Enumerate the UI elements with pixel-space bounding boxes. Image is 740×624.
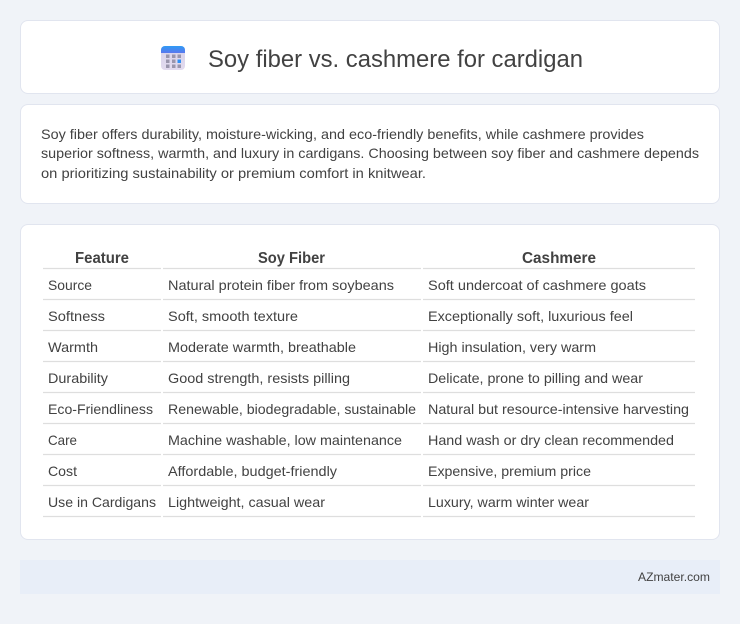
row: warmth: Warmth [48,339,98,355]
row: durability [48,370,643,386]
row: warmth [48,339,596,355]
row: durability: Durability [48,370,108,386]
row: care: Hand wash or dry clean recommended [428,432,674,448]
table header: Cashmere [522,250,596,267]
row: warmth: Moderate warmth, breathable [168,339,356,355]
row: durability: Good strength, resists pilling [168,370,350,386]
panel: title card [20,20,720,94]
row: cost: Cost [48,463,77,479]
icon: calendar [161,46,185,70]
text block: summary: on prioritizing sustainability or premium comfort in knitwear. [41,165,426,181]
row: cost: Expensive, premium price [428,463,591,479]
row: eco-friendliness [48,401,689,417]
row: care [48,432,674,448]
panel: table card [20,224,720,540]
table header: Feature [75,250,129,267]
row: durability: Delicate, prone to pilling and wear [428,370,643,386]
row: eco-friendliness: Eco-Friendliness [48,401,153,417]
row: softness: Softness [48,308,105,324]
row: softness: Soft, smooth texture [168,308,298,324]
row: source: Natural protein fiber from soybeans [168,277,394,293]
text block: summary: Soy fiber offers durability, moisture-wicking, and eco-friendly benefits, while cashmere provides [41,126,644,142]
row: care: Care [48,432,77,448]
row: softness [48,308,633,324]
row: use in cardigans: Lightweight, casual wear [168,494,325,510]
row: care: Machine washable, low maintenance [168,432,402,448]
row: use in cardigans: Luxury, warm winter wear [428,494,589,510]
row: cost: Affordable, budget-friendly [168,463,337,479]
table header: Soy Fiber [258,250,325,267]
row: warmth: High insulation, very warm [428,339,596,355]
row: eco-friendliness: Renewable, biodegradable, sustainable [168,401,416,417]
footer bar [20,560,720,594]
title: Soy fiber vs. cashmere for cardigan [208,46,583,73]
row: softness: Exceptionally soft, luxurious feel [428,308,633,324]
footer credit: AZmater.com [638,570,710,584]
row: cost [48,463,591,479]
row: use in cardigans [48,494,589,510]
text block: summary [41,126,699,181]
table header [75,250,596,267]
row: source [48,277,646,293]
row: source: Soft undercoat of cashmere goats [428,277,646,293]
row: source: Source [48,277,92,293]
panel: summary card [20,104,720,204]
text block: summary: superior softness, warmth, and luxury in cardigans. Choosing between soy fiber and cashmere depends [41,145,699,161]
row: use in cardigans: Use in Cardigans [48,494,156,510]
comparison table [43,250,695,516]
row: eco-friendliness: Natural but resource-intensive harvesting [428,401,689,417]
